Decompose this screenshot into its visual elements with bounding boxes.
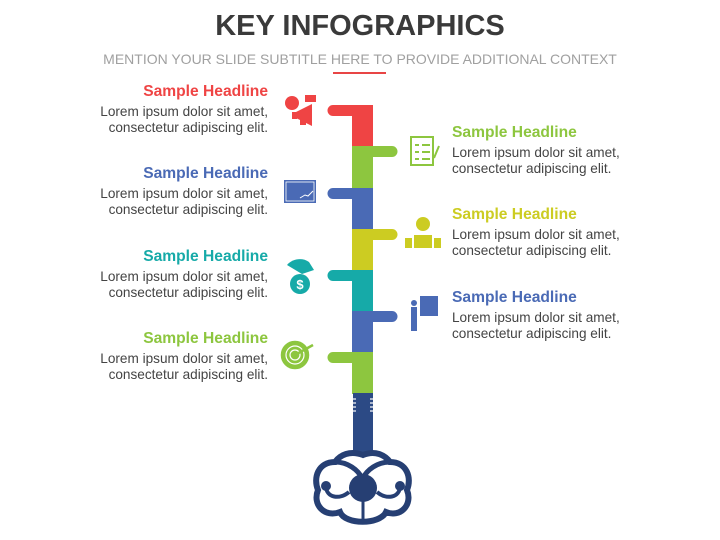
icon: checklist	[411, 137, 439, 165]
text block 6: consectetur adipiscing elit.	[452, 326, 611, 341]
text block 7: consectetur adipiscing elit.	[109, 367, 268, 382]
text block 4: consectetur adipiscing elit.	[452, 243, 611, 258]
icon: globe store	[405, 217, 441, 248]
icon: money hand	[287, 259, 314, 294]
icon: presenter	[411, 296, 438, 331]
text block 7	[100, 330, 268, 382]
text block 7: Sample Headline	[143, 330, 268, 347]
text block 6	[452, 289, 620, 341]
text block 2: Lorem ipsum dolor sit amet,	[452, 145, 620, 160]
text block 3	[100, 165, 268, 217]
title: KEY INFOGRAPHICS	[215, 10, 505, 42]
text block 5: consectetur adipiscing elit.	[109, 285, 268, 300]
icon: target	[282, 342, 313, 368]
icon: money hand: $	[296, 277, 304, 292]
icon: megaphone	[285, 95, 316, 126]
text block 2: consectetur adipiscing elit.	[452, 161, 611, 176]
text block 6: Lorem ipsum dolor sit amet,	[452, 310, 620, 325]
icon: dashboard board	[284, 180, 316, 203]
text block 2	[452, 124, 620, 176]
text block 1: consectetur adipiscing elit.	[109, 120, 268, 135]
text block 4: Lorem ipsum dolor sit amet,	[452, 227, 620, 242]
text block 3: Sample Headline	[143, 165, 268, 182]
text block 4: Sample Headline	[452, 206, 577, 223]
text block 4	[452, 206, 620, 258]
text block 7: Lorem ipsum dolor sit amet,	[100, 351, 268, 366]
key segments	[328, 105, 398, 394]
text block 6: Sample Headline	[452, 289, 577, 306]
text block 5: Lorem ipsum dolor sit amet,	[100, 269, 268, 284]
subtitle: MENTION YOUR SLIDE SUBTITLE HERE TO PROVIDE ADDITIONAL CONTEXT	[103, 51, 617, 67]
text block 5	[100, 248, 268, 300]
text block 3: Lorem ipsum dolor sit amet,	[100, 186, 268, 201]
key handle	[316, 393, 409, 523]
text block 1: Lorem ipsum dolor sit amet,	[100, 104, 268, 119]
text block 2: Sample Headline	[452, 124, 577, 141]
text block 1: Sample Headline	[143, 83, 268, 100]
text block 5: Sample Headline	[143, 248, 268, 265]
text block 1	[100, 83, 268, 135]
text block 3: consectetur adipiscing elit.	[109, 202, 268, 217]
